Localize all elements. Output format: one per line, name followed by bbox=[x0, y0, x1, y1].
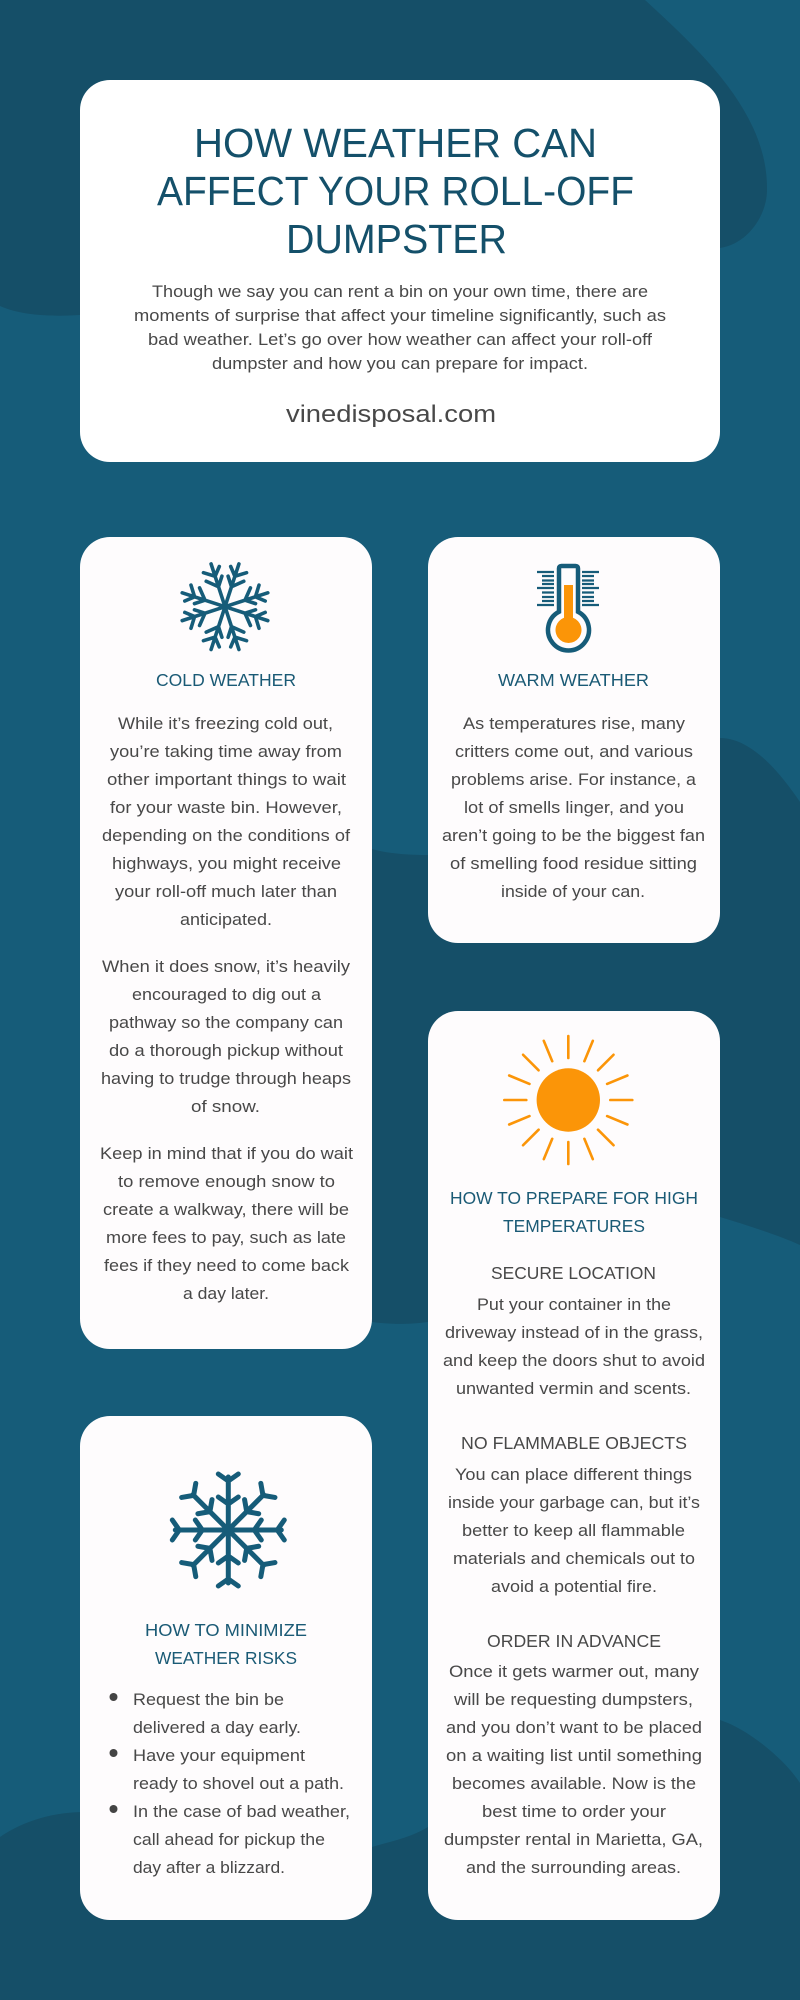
icon: large snowflake bbox=[172, 1474, 284, 1586]
text block: paragraph 1: you’re taking time away from bbox=[110, 742, 342, 761]
text block: warm weather: inside of your can. bbox=[501, 882, 645, 901]
text block: warm weather: critters come out, and various bbox=[455, 742, 693, 761]
panel: title card bbox=[80, 80, 720, 462]
icon: thermometer bbox=[537, 566, 599, 650]
text block: paragraph 1 bbox=[102, 714, 350, 929]
bullet list: delivered a day early. bbox=[133, 1718, 301, 1737]
text block: secure location: Put your container in the bbox=[477, 1295, 671, 1314]
text block: paragraph 3 bbox=[100, 1144, 353, 1303]
text block: paragraph 3: Keep in mind that if you do wait bbox=[100, 1144, 353, 1163]
text block: no flammable objects: better to keep all flammable bbox=[462, 1521, 685, 1540]
subheading: no flammable objects: NO FLAMMABLE OBJECTS bbox=[461, 1433, 687, 1453]
bullet list: Request the bin be bbox=[133, 1690, 284, 1709]
website: vinedisposal.com bbox=[286, 401, 496, 428]
background blob: top bbox=[0, 0, 767, 316]
title: AFFECT YOUR ROLL-OFF bbox=[157, 168, 634, 214]
text block: paragraph 1: anticipated. bbox=[180, 910, 272, 929]
text block: paragraph 2: encouraged to dig out a bbox=[132, 985, 322, 1004]
text block: no flammable objects: avoid a potential fire. bbox=[491, 1577, 657, 1596]
text block: warm weather bbox=[442, 714, 705, 901]
text block: paragraph 2: do a thorough pickup without bbox=[109, 1041, 343, 1060]
text block: paragraph 2: When it does snow, it’s heavily bbox=[102, 957, 351, 976]
text block: no flammable objects bbox=[448, 1465, 700, 1596]
intro text: moments of surprise that affect your timeline significantly, such as bbox=[134, 306, 666, 325]
text block: paragraph 3: more fees to pay, such as late bbox=[106, 1228, 346, 1247]
text block: warm weather: As temperatures rise, many bbox=[463, 714, 686, 733]
heading: how to minimize: WEATHER RISKS bbox=[155, 1648, 297, 1668]
text block: paragraph 1: for your waste bin. However, bbox=[110, 798, 342, 817]
text block: paragraph 1: highways, you might receive bbox=[112, 854, 341, 873]
heading: how to prepare: TEMPERATURES bbox=[503, 1216, 645, 1236]
text block: paragraph 2: having to trudge through heaps bbox=[101, 1069, 351, 1088]
text block: order in advance: and you don’t want to be placed bbox=[446, 1718, 702, 1737]
text block: secure location: unwanted vermin and scents. bbox=[456, 1379, 691, 1398]
title: HOW WEATHER CAN bbox=[194, 120, 597, 166]
text block: paragraph 2 bbox=[101, 957, 351, 1116]
icon: sun bbox=[504, 1036, 632, 1164]
background blob: bottom bbox=[0, 1700, 800, 2000]
text block: paragraph 3: create a walkway, there will be bbox=[103, 1200, 349, 1219]
text block: secure location: driveway instead of in the grass, bbox=[445, 1323, 703, 1342]
heading: how to minimize: HOW TO MINIMIZE bbox=[145, 1620, 307, 1640]
text block: order in advance bbox=[444, 1662, 703, 1877]
text block: warm weather: problems arise. For instance, a bbox=[451, 770, 697, 789]
text block: warm weather: of smelling food residue sitting bbox=[450, 854, 697, 873]
text block: paragraph 2: pathway so the company can bbox=[109, 1013, 343, 1032]
intro text: bad weather. Let’s go over how weather can affect your roll-off bbox=[148, 330, 652, 349]
text block: paragraph 1: other important things to wait bbox=[107, 770, 346, 789]
subheading: secure location: SECURE LOCATION bbox=[491, 1263, 656, 1283]
panel: warm weather bbox=[428, 537, 720, 943]
background blob: middle bbox=[200, 738, 800, 1324]
text block: secure location bbox=[443, 1295, 705, 1398]
bullet list bbox=[110, 1690, 350, 1877]
text block: warm weather: lot of smells linger, and you bbox=[464, 798, 684, 817]
heading: cold weather: COLD WEATHER bbox=[156, 670, 296, 690]
panel: how to minimize weather risks bbox=[80, 1416, 372, 1920]
text block: no flammable objects: materials and chemicals out to bbox=[453, 1549, 695, 1568]
text block: order in advance: best time to order your bbox=[482, 1802, 666, 1821]
bullet list: In the case of bad weather, bbox=[133, 1802, 350, 1821]
subheading: order in advance: ORDER IN ADVANCE bbox=[487, 1631, 661, 1651]
text block: no flammable objects: inside your garbage can, but it’s bbox=[448, 1493, 700, 1512]
text block: paragraph 3: a day later. bbox=[183, 1284, 269, 1303]
text block: order in advance: on a waiting list until something bbox=[446, 1746, 702, 1765]
text block: warm weather: aren’t going to be the biggest fan bbox=[442, 826, 705, 845]
title bbox=[157, 120, 634, 262]
text block: paragraph 1: your roll-off much later than bbox=[115, 882, 337, 901]
icon: snowflake bbox=[180, 562, 270, 652]
text block: paragraph 3: to remove enough snow to bbox=[118, 1172, 335, 1191]
text block: no flammable objects: You can place different things bbox=[455, 1465, 692, 1484]
heading: how to prepare bbox=[450, 1188, 698, 1236]
text block: order in advance: dumpster rental in Marietta, GA, bbox=[444, 1830, 703, 1849]
panel: how to prepare for high temperatures bbox=[428, 1011, 720, 1920]
intro text: Though we say you can rent a bin on your own time, there are bbox=[152, 282, 648, 301]
bullet list: ready to shovel out a path. bbox=[133, 1774, 344, 1793]
text block: order in advance: and the surrounding areas. bbox=[466, 1858, 681, 1877]
intro text: dumpster and how you can prepare for impact. bbox=[212, 354, 588, 373]
text block: order in advance: Once it gets warmer out, many bbox=[449, 1662, 700, 1681]
panel: cold weather bbox=[80, 537, 372, 1349]
bullet list: call ahead for pickup the bbox=[133, 1830, 325, 1849]
text block: paragraph 1: While it’s freezing cold out, bbox=[118, 714, 333, 733]
bullet list: day after a blizzard. bbox=[133, 1858, 285, 1877]
bullet list: Have your equipment bbox=[133, 1746, 305, 1765]
text block: order in advance: will be requesting dumpsters, bbox=[453, 1690, 693, 1709]
text block: order in advance: becomes available. Now is the bbox=[452, 1774, 696, 1793]
text block: paragraph 3: fees if they need to come back bbox=[104, 1256, 350, 1275]
text block: paragraph 2: of snow. bbox=[191, 1097, 260, 1116]
heading: how to minimize bbox=[145, 1620, 307, 1668]
text block: secure location: and keep the doors shut to avoid bbox=[443, 1351, 705, 1370]
title: DUMPSTER bbox=[286, 216, 507, 262]
heading: how to prepare: HOW TO PREPARE FOR HIGH bbox=[450, 1188, 698, 1208]
heading: warm weather: WARM WEATHER bbox=[498, 670, 649, 690]
text block: paragraph 1: depending on the conditions of bbox=[102, 826, 350, 845]
intro text bbox=[134, 282, 666, 373]
